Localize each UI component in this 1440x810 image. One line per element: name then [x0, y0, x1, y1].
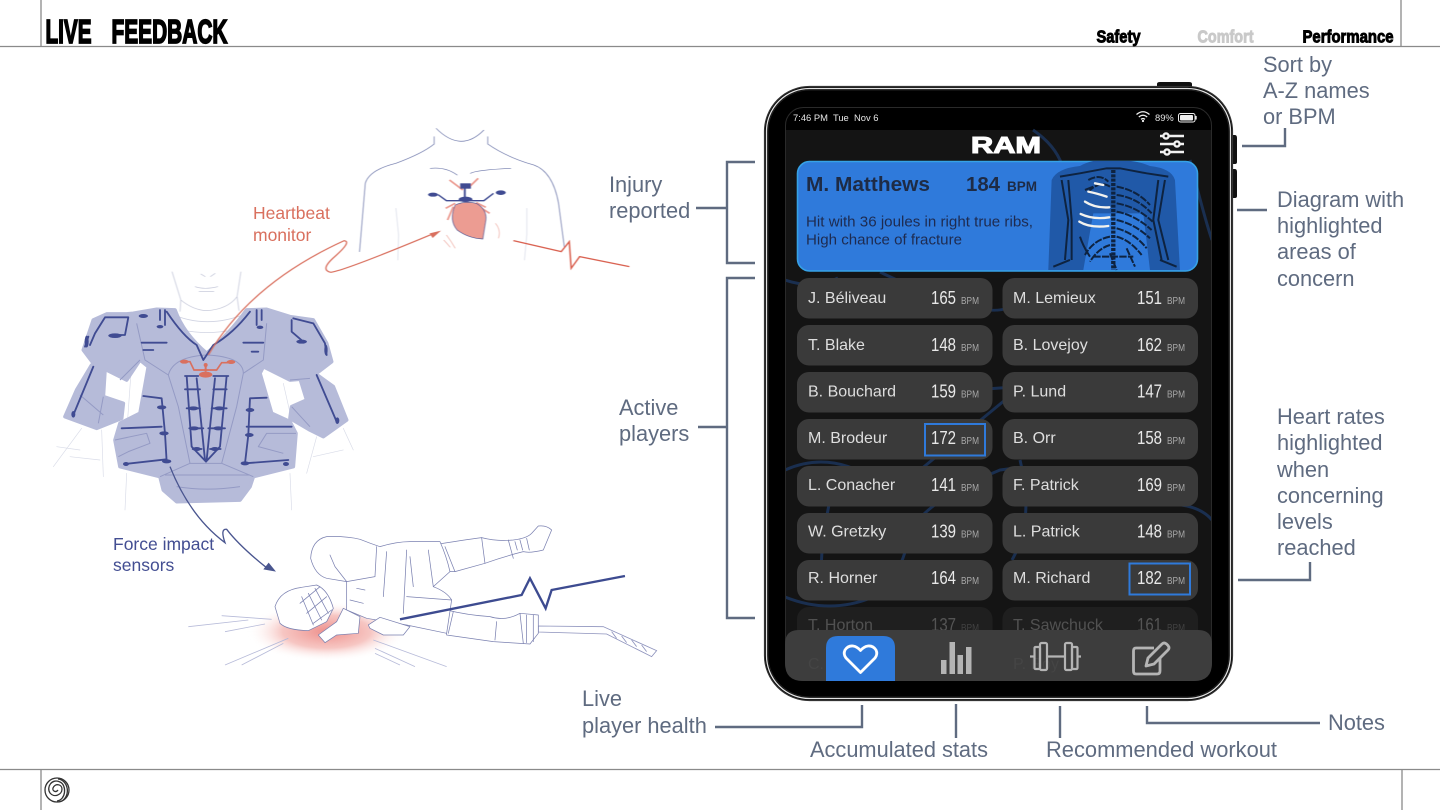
- row: L. Patrick: [1002, 513, 1198, 554]
- row: Béliveau: [797, 278, 992, 318]
- row: Lund: [1002, 372, 1198, 412]
- row: Blake: 148: [931, 335, 956, 355]
- player list: [797, 278, 1198, 648]
- callout: injury reported: reported: [609, 198, 690, 223]
- callout: sort by: [1242, 52, 1370, 146]
- faded rows: 137: [931, 615, 956, 635]
- row: Lovejoy: B. Lovejoy: [1013, 337, 1088, 354]
- row: Lemieux: 151: [1137, 288, 1162, 308]
- callout: diagram: concern: [1277, 266, 1355, 291]
- lower leg: [447, 610, 538, 644]
- body and jersey: [311, 537, 452, 633]
- row: Horner: [797, 560, 992, 600]
- row: Bouchard: BPM: [961, 388, 979, 400]
- callout: injury reported: Injury: [609, 172, 662, 197]
- title: LIVE: [46, 13, 92, 50]
- label: force impact sensors: Force impact: [113, 534, 214, 554]
- icon: sensors: [428, 183, 506, 202]
- faded rows: [797, 607, 1198, 648]
- injury card: [798, 160, 1198, 271]
- faint rows behind tab bar: C. Hull: [808, 656, 856, 673]
- row: Bouchard: 159: [931, 382, 956, 402]
- header navigation: Comfort: [1198, 26, 1254, 46]
- hardware buttons: [1157, 82, 1237, 198]
- header navigation: Safety: [1096, 26, 1141, 46]
- arrow: heartbeat link: [208, 233, 434, 355]
- icon: spiral logo: [45, 778, 69, 802]
- icon: red vessels: [446, 178, 490, 220]
- faint rows behind tab bar: [808, 656, 1059, 673]
- row: Gretzky: BPM: [961, 528, 979, 540]
- row: Béliveau: BPM: [961, 295, 979, 307]
- highlighted ribs: [1079, 183, 1109, 227]
- callout: live player health: Live: [582, 686, 622, 711]
- row: Conacher: 141: [931, 475, 956, 495]
- illustration: shoulder pads: [53, 309, 353, 510]
- label: heartbeat monitor: [253, 203, 330, 245]
- faded rows: T. Horton: [808, 617, 873, 634]
- label: heartbeat monitor: Heartbeat: [253, 203, 330, 223]
- injury card: 184: [966, 174, 1001, 196]
- gloves: [318, 608, 360, 643]
- row: Orr: [1002, 419, 1198, 460]
- callout: heart rates: reached: [1277, 535, 1356, 560]
- row: Lund: 147: [1137, 382, 1162, 402]
- icon: battery: [1178, 114, 1197, 122]
- callout: heart rates: highlighted: [1277, 430, 1382, 455]
- faded rows: BPM: [961, 622, 979, 634]
- row: Lund: BPM: [1167, 388, 1185, 400]
- label: heartbeat monitor: monitor: [253, 225, 312, 245]
- row: Lovejoy: 162: [1137, 335, 1162, 355]
- row: F. Patrick: [1002, 466, 1198, 506]
- callout: heart rates: levels: [1277, 509, 1333, 534]
- callout: active players: Active: [619, 395, 678, 420]
- row: Brodeur (highlighted): BPM: [961, 435, 979, 447]
- callout: live player health: [582, 686, 862, 738]
- row: Brodeur (highlighted): M. Brodeur: [808, 430, 888, 447]
- callout: heart rates: Heart rates: [1277, 404, 1385, 429]
- callout: sort by: Sort by: [1263, 52, 1332, 77]
- callout: sort by: A-Z names: [1263, 78, 1370, 103]
- callout: diagram: Diagram with: [1277, 187, 1404, 212]
- callout: active players: [619, 278, 755, 618]
- faded rows: 161: [1137, 615, 1162, 635]
- icon: notes: [1134, 643, 1169, 674]
- icon: dumbbell: [1030, 643, 1081, 670]
- callout: diagram: areas of: [1277, 239, 1357, 264]
- row: Conacher: BPM: [961, 482, 979, 494]
- row: Richard (highlighted): BPM: [1167, 575, 1185, 587]
- callout: diagram: [1237, 187, 1404, 291]
- row: Brodeur (highlighted): 172: [931, 428, 956, 448]
- row: L. Patrick: 148: [1137, 522, 1162, 542]
- row: Bouchard: [797, 372, 992, 412]
- illustration: fallen player: [170, 467, 657, 667]
- row: Horner: R. Horner: [808, 570, 878, 587]
- label: force impact sensors: [113, 534, 214, 575]
- impact lines: [188, 616, 447, 667]
- injury details: Hit with 36 joules in right true ribs,: [806, 214, 1033, 230]
- arrow: force impact: [170, 467, 267, 568]
- row: Lovejoy: [1002, 325, 1198, 366]
- row: Richard (highlighted): M. Richard: [1013, 570, 1090, 587]
- row: L. Patrick: L. Patrick: [1013, 524, 1081, 540]
- faded rows: BPM: [1167, 622, 1185, 634]
- row: Brodeur (highlighted): [797, 419, 992, 460]
- callout: heart rates: when: [1276, 457, 1329, 482]
- icon: bar chart: [941, 642, 972, 674]
- sensor wiring: [90, 310, 262, 360]
- bezel: [764, 86, 1232, 700]
- label: force impact sensors: sensors: [113, 555, 175, 575]
- header navigation: [1096, 26, 1394, 46]
- row: F. Patrick: BPM: [1167, 482, 1185, 494]
- callout: injury reported: [609, 162, 755, 263]
- callout: recommended workout: Recommended workout: [1046, 737, 1277, 762]
- row: L. Patrick: BPM: [1167, 528, 1185, 540]
- row: Lemieux: [1002, 278, 1198, 318]
- ecg line: impact: [400, 576, 625, 619]
- face and neck: [172, 272, 241, 312]
- undershirt collar: [170, 313, 247, 332]
- icon: wifi: [1136, 112, 1150, 122]
- callout: diagram: highlighted: [1277, 213, 1382, 238]
- row: Gretzky: W. Gretzky: [808, 524, 886, 540]
- skeleton diagram: [1048, 160, 1180, 270]
- red monitor unit: [180, 360, 235, 378]
- row: Blake: [797, 325, 992, 366]
- screen: [786, 128, 1211, 637]
- injury card: High chance of fracture: [806, 232, 962, 248]
- callout: active players: players: [619, 421, 689, 446]
- upper leg: [433, 526, 552, 572]
- row: Orr: BPM: [1167, 435, 1185, 447]
- row: Béliveau: 165: [931, 288, 956, 308]
- status bar: 7:46 PM Tue Nov 6: [793, 112, 878, 123]
- row: Lovejoy: BPM: [1167, 342, 1185, 354]
- heart pulse waves: [444, 223, 499, 248]
- icon: heart: [844, 646, 877, 672]
- row: Béliveau: J. Béliveau: [808, 290, 886, 307]
- illustration: chest with heart: [172, 128, 629, 355]
- RAM logo: RAM: [971, 132, 1041, 158]
- row: Orr: 158: [1137, 428, 1162, 448]
- row: Richard (highlighted): [1002, 560, 1198, 600]
- background skeleton curves: [785, 130, 1212, 606]
- callout: live player health: player health: [582, 713, 707, 738]
- ecg line: heartbeat: [513, 241, 629, 268]
- status bar: [793, 112, 1197, 123]
- row: Conacher: L. Conacher: [808, 477, 896, 494]
- row: Horner: BPM: [961, 575, 979, 587]
- pad seams: [80, 323, 310, 489]
- row: F. Patrick: F. Patrick: [1013, 477, 1080, 494]
- callout: accumulated stats: Accumulated stats: [810, 737, 988, 762]
- faded rows: T. Sawchuck: [1013, 617, 1104, 634]
- header navigation: Performance: [1302, 26, 1394, 46]
- chest protector: [83, 309, 332, 502]
- helmet and cage: [275, 585, 333, 631]
- icon: heart: [452, 202, 486, 239]
- callout: heart rates: concerning: [1277, 483, 1384, 508]
- active tab: [826, 636, 895, 681]
- arm pads: [65, 365, 123, 428]
- row: Horner: 164: [931, 568, 956, 588]
- row: F. Patrick: 169: [1137, 475, 1162, 495]
- tablet device: [764, 82, 1237, 700]
- impact glow: [247, 602, 407, 662]
- row: Gretzky: [797, 513, 992, 554]
- faint rows behind tab bar: P. Roy: [1013, 656, 1059, 673]
- callout: sort by: or BPM: [1263, 104, 1336, 129]
- torso outline: [53, 363, 353, 510]
- title: FEEDBACK: [112, 13, 228, 50]
- callout: notes: [1147, 706, 1385, 735]
- row: Bouchard: B. Bouchard: [808, 384, 896, 400]
- hockey stick: [538, 626, 657, 657]
- injury card: BPM: [1007, 179, 1037, 194]
- callout: notes: Notes: [1328, 710, 1385, 735]
- tab bar: [785, 630, 1212, 681]
- row: Gretzky: 139: [931, 522, 956, 542]
- row: Blake: BPM: [961, 342, 979, 354]
- row: Richard (highlighted): 182: [1137, 568, 1162, 588]
- row: Blake: T. Blake: [808, 337, 865, 354]
- title: [46, 13, 228, 50]
- row: Lemieux: M. Lemieux: [1013, 290, 1096, 307]
- icon: sort sliders: [1160, 133, 1184, 155]
- row: Conacher: [797, 466, 992, 506]
- row: Lund: P. Lund: [1013, 384, 1066, 400]
- patient name and BPM: M. Matthews: [806, 174, 930, 196]
- row: Lemieux: BPM: [1167, 295, 1185, 307]
- status bar: 89%: [1155, 112, 1174, 123]
- row: Orr: B. Orr: [1013, 430, 1056, 447]
- callout: heart rates: [1238, 404, 1385, 580]
